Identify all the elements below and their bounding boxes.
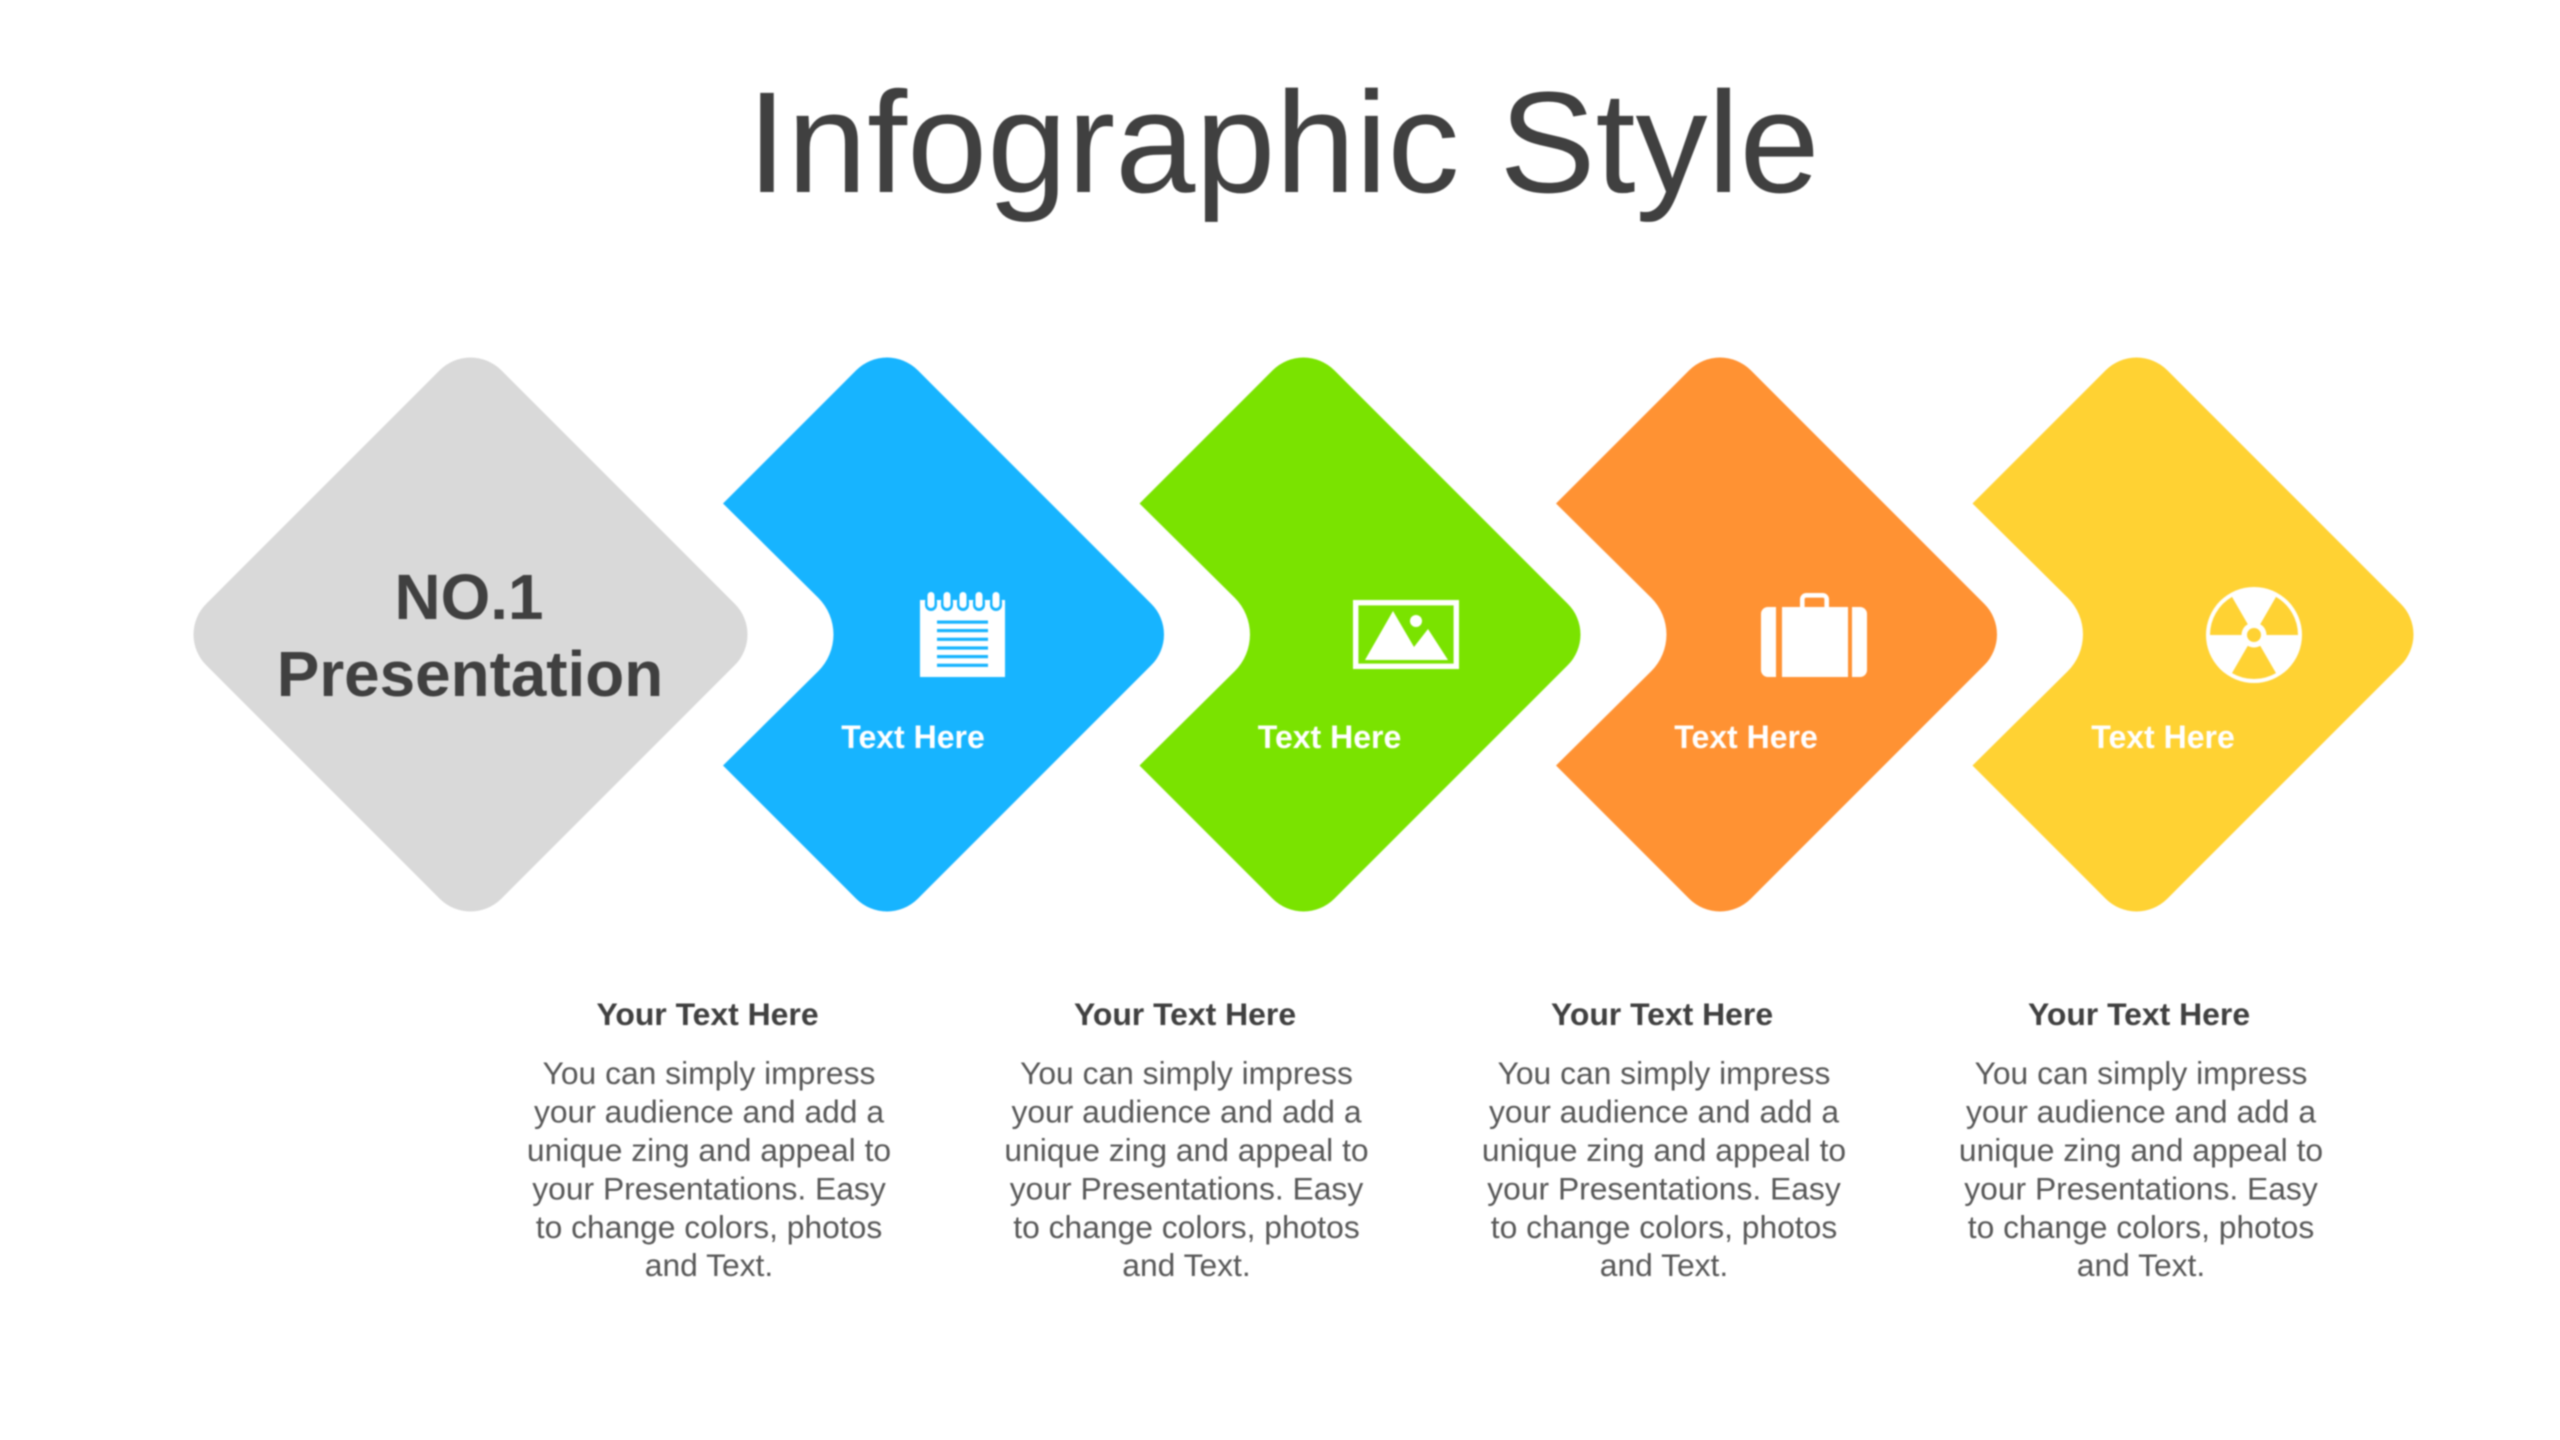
column 4 heading: Your Text Here — [2028, 996, 2250, 1032]
diamond heading: NO.1 — [395, 561, 543, 633]
column 3 body: You can simply impress — [1498, 1055, 1830, 1091]
column 1 heading: Your Text Here — [596, 996, 819, 1032]
text block: column 2 — [1004, 996, 1369, 1283]
column 4 body: your Presentations. Easy — [1964, 1170, 2318, 1206]
panel: yellow chevron step — [1972, 358, 2413, 911]
column 2 body: your audience and add a — [1011, 1094, 1362, 1130]
column 3 body: your audience and add a — [1489, 1094, 1839, 1130]
panel: blue chevron step — [723, 358, 1164, 911]
column 2 body: You can simply impress — [1020, 1055, 1353, 1091]
label: Text Here: Text Here — [1674, 719, 1818, 755]
panel: orange chevron step — [1556, 358, 1997, 911]
blue chevron shape — [723, 358, 1164, 911]
column 4 body: your audience and add a — [1966, 1094, 2316, 1130]
diamond heading: Presentation — [277, 638, 663, 710]
column 1 body — [527, 1055, 891, 1283]
column 1 body: to change colors, photos — [536, 1209, 882, 1245]
label: Text Here: Text Here — [1258, 719, 1401, 755]
label: Text Here: Text Here — [2091, 719, 2235, 755]
panel: NO.1 presentation diamond — [194, 358, 747, 911]
column 4 body: unique zing and appeal to — [1959, 1132, 2323, 1168]
text block: column 1 — [527, 996, 891, 1283]
column 1 body: unique zing and appeal to — [527, 1132, 891, 1168]
column 3 body: and Text. — [1600, 1247, 1728, 1283]
yellow chevron shape — [1972, 358, 2413, 911]
label: Text Here: Text Here — [841, 719, 985, 755]
gray diamond shape — [194, 358, 747, 911]
green chevron shape — [1140, 358, 1580, 911]
column 3 heading: Your Text Here — [1551, 996, 1773, 1032]
column 2 body — [1004, 1055, 1369, 1283]
icon: picture — [1356, 603, 1456, 666]
text block: column 3 — [1482, 996, 1846, 1283]
column 4 body: to change colors, photos — [1968, 1209, 2314, 1245]
column 4 body: and Text. — [2077, 1247, 2205, 1283]
column 2 body: and Text. — [1122, 1247, 1251, 1283]
column 1 body: your Presentations. Easy — [532, 1170, 886, 1206]
title: Infographic Style — [747, 62, 1820, 223]
icon: radiation symbol — [2206, 587, 2302, 683]
column 3 body: unique zing and appeal to — [1482, 1132, 1846, 1168]
column 2 heading: Your Text Here — [1074, 996, 1296, 1032]
column 2 body: your Presentations. Easy — [1010, 1170, 1363, 1206]
column 4 body: You can simply impress — [1975, 1055, 2307, 1091]
column 1 body: and Text. — [645, 1247, 773, 1283]
panel: green chevron step — [1140, 358, 1580, 911]
column 1 body: your audience and add a — [534, 1094, 884, 1130]
icon: briefcase — [1761, 595, 1867, 677]
column 2 body: unique zing and appeal to — [1004, 1132, 1369, 1168]
column 3 body: to change colors, photos — [1491, 1209, 1837, 1245]
column 4 body — [1959, 1055, 2323, 1283]
icon: notepad — [920, 592, 1005, 677]
column 2 body: to change colors, photos — [1013, 1209, 1360, 1245]
diamond heading — [277, 561, 663, 710]
column 3 body — [1482, 1055, 1846, 1283]
column 3 body: your Presentations. Easy — [1487, 1170, 1841, 1206]
text block: column 4 — [1959, 996, 2323, 1283]
column 1 body: You can simply impress — [543, 1055, 875, 1091]
orange chevron shape — [1556, 358, 1997, 911]
